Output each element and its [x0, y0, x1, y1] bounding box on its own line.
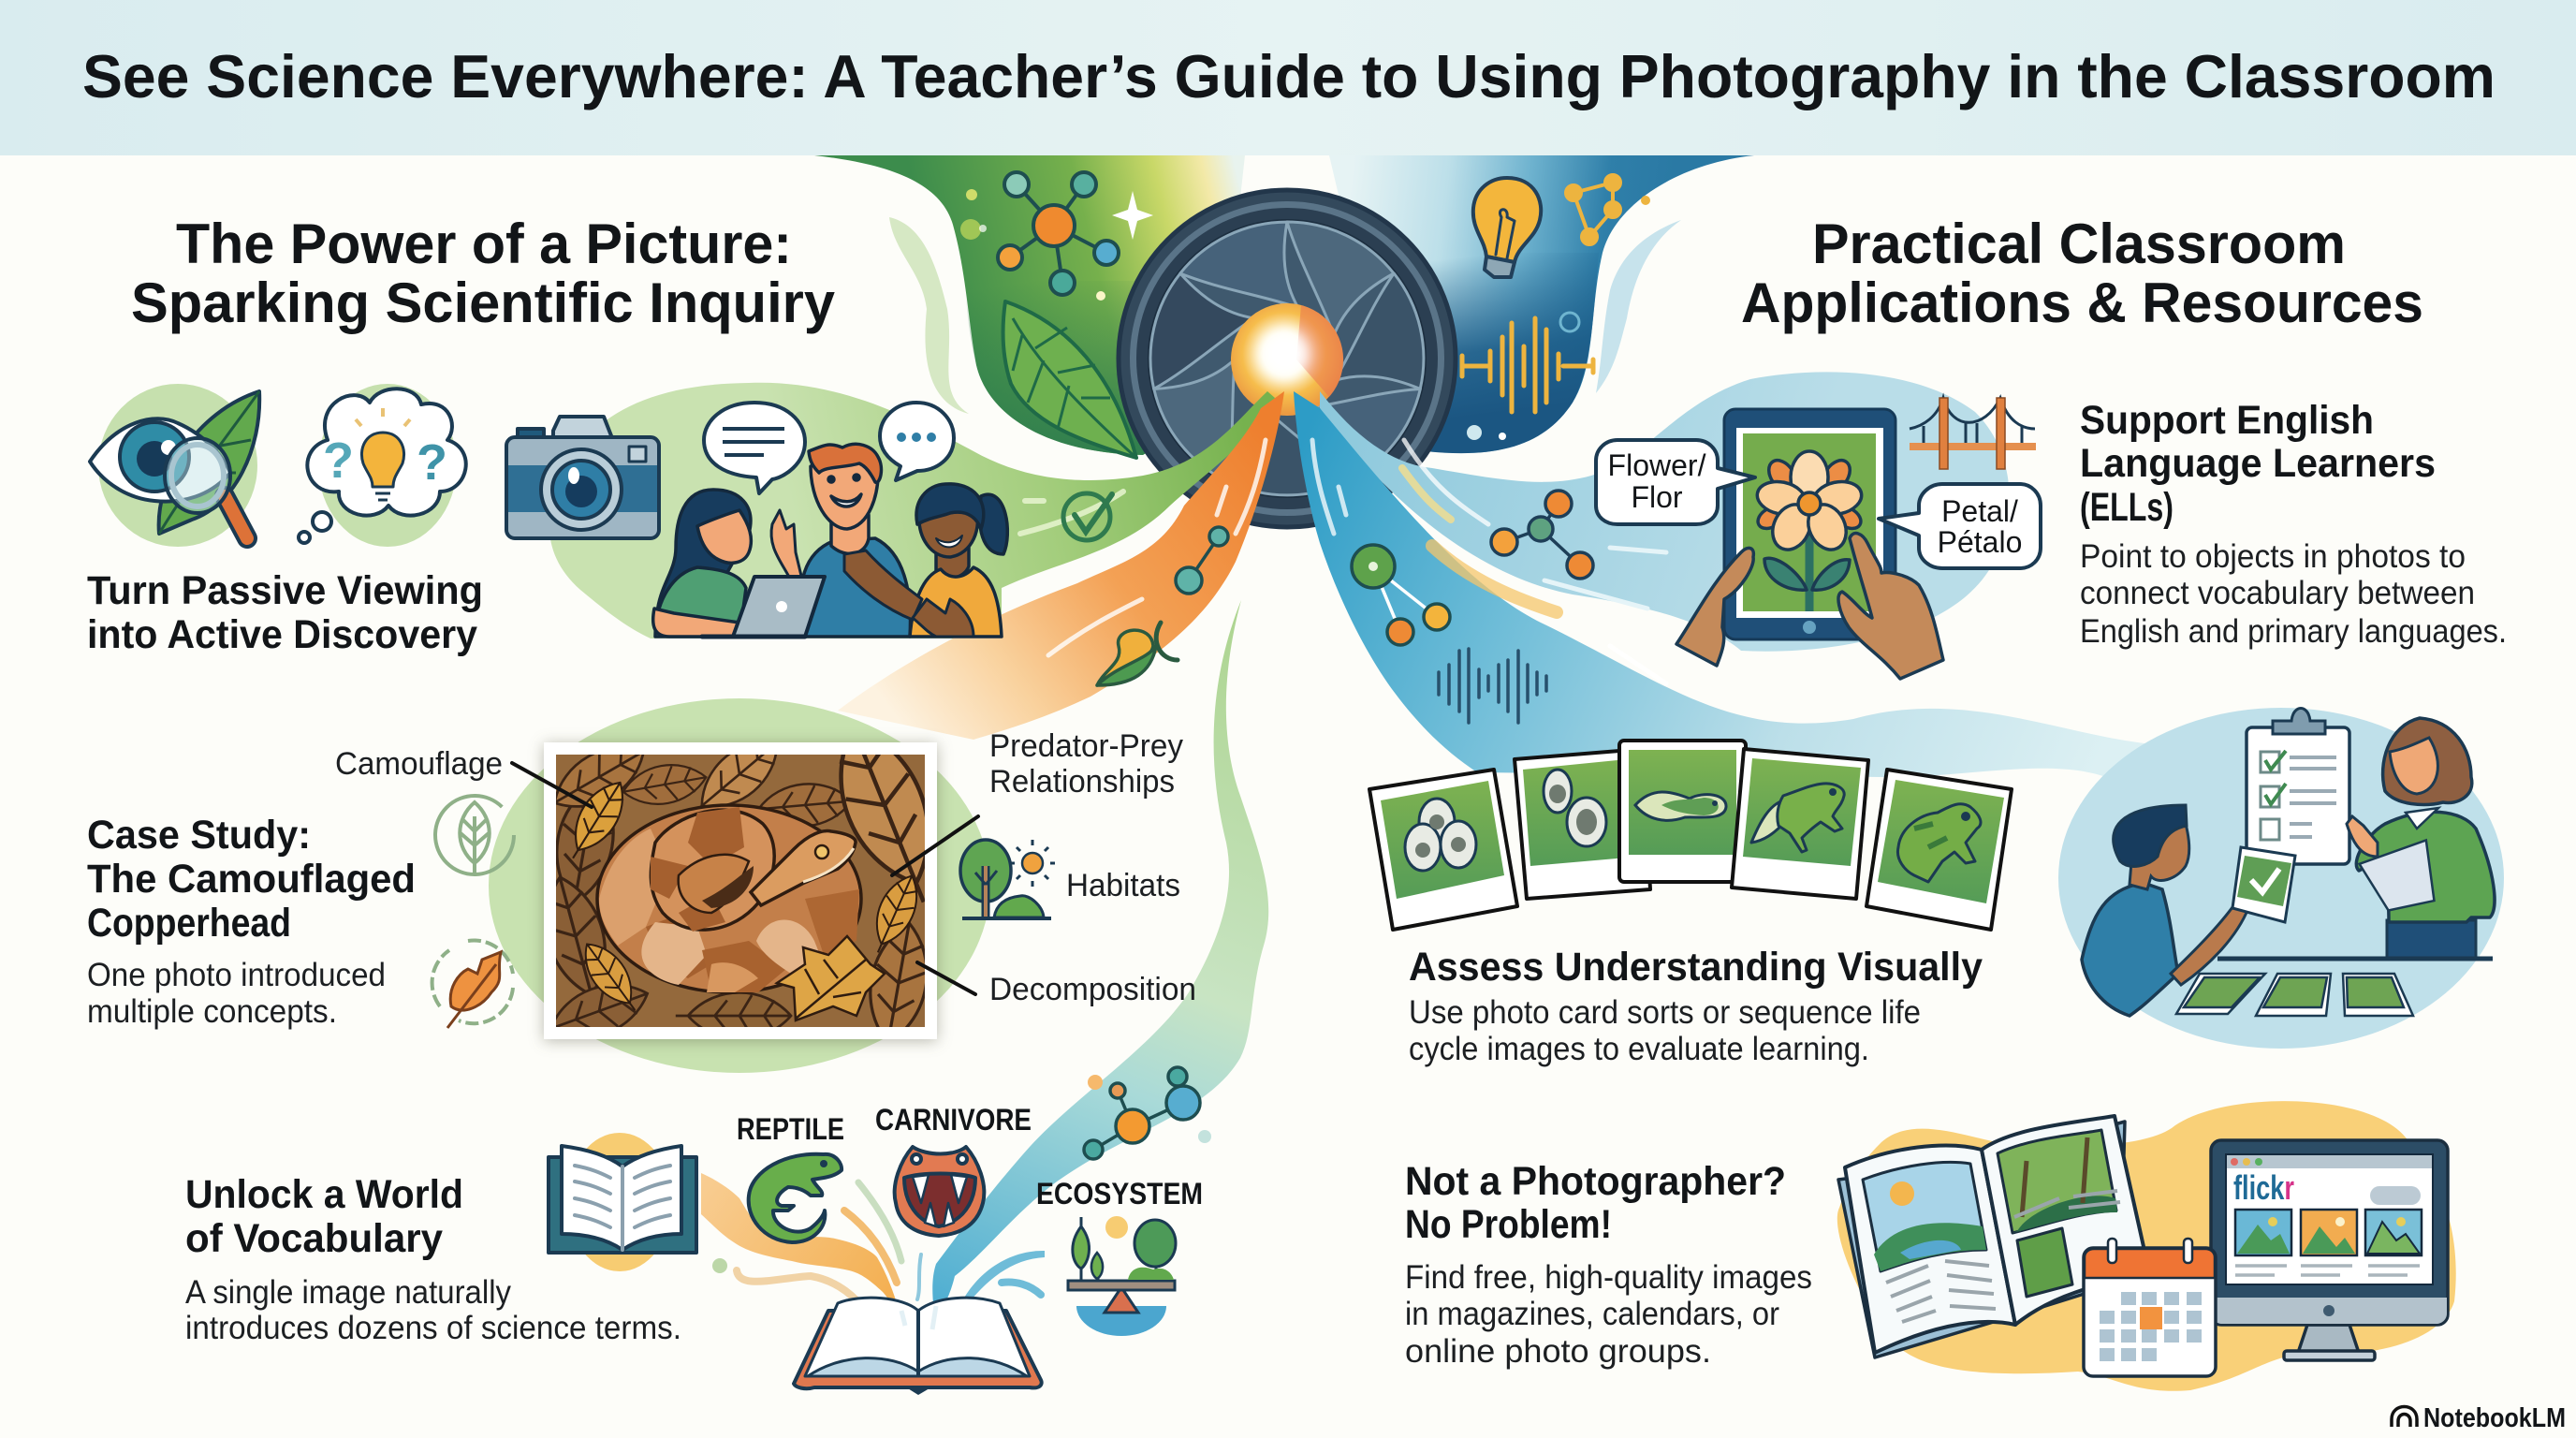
icon: tree and sun habitat [960, 840, 1055, 918]
aperture blades [1130, 190, 1460, 528]
left heading: The Power of a Picture: [176, 213, 792, 275]
text: turn passive viewing: into Active Discovery [87, 612, 477, 657]
leaf litter [556, 755, 925, 1027]
green circle behind photo [489, 698, 990, 1073]
icon: sparkle [1112, 191, 1153, 240]
right heading [1741, 213, 2423, 334]
icon: camera [506, 417, 659, 538]
callout: flower: Flower/ [1608, 448, 1706, 482]
text: unlock vocabulary: Unlock a World [185, 1172, 463, 1217]
icon: lizard [749, 1154, 842, 1242]
callout: petal: Pétalo [1938, 525, 2022, 559]
text: turn passive viewing: Turn Passive Viewing [87, 568, 483, 613]
icon: thought cloud with bulb: ? [323, 433, 354, 489]
callout: flower [1596, 440, 1755, 524]
callout: flower: Flor [1631, 480, 1683, 514]
labels: photo callouts [335, 728, 1196, 1007]
icon: open book with yellow circle [549, 1133, 696, 1271]
icon: light bulb [1473, 178, 1541, 277]
left heading [131, 213, 836, 334]
monitor [2211, 1140, 2448, 1360]
card 2: eggs hatching [1515, 749, 1650, 899]
card 1: eggs [1369, 770, 1517, 930]
text: support ELLs: connect vocabulary between [2080, 575, 2475, 611]
label: reptile: REPTILE [737, 1112, 844, 1146]
text: not a photographer: online photo groups. [1405, 1333, 1711, 1370]
icon: large leaf [1003, 301, 1136, 458]
labels: photo callouts: Habitats [1066, 868, 1180, 903]
tablet device [1724, 409, 1895, 639]
text: support ELLs: Point to objects in photos to [2080, 538, 2466, 575]
photo cards: frog life cycle [1369, 741, 2012, 930]
icon: molecule green [998, 172, 1119, 295]
label: carnivore: CARNIVORE [875, 1103, 1032, 1137]
student [2082, 805, 2248, 1016]
check card [2232, 847, 2295, 922]
text: case study [87, 813, 416, 1030]
blue circle [2058, 708, 2504, 1049]
card 3: tadpole [1619, 741, 1746, 882]
text: not a photographer: in magazines, calendars, or [1405, 1296, 1779, 1332]
icon: leaf in circle [435, 796, 514, 874]
text: assess understanding: Use photo card sorts or sequence life [1409, 994, 1921, 1031]
text: assess understanding: cycle images to evaluate learning. [1409, 1031, 1869, 1067]
right student [844, 484, 1007, 637]
callout: petal [1879, 484, 2041, 568]
stream: green to discovery [549, 383, 1275, 638]
orange ribbon [701, 1173, 1045, 1323]
speech bubble left [704, 403, 805, 493]
icon: thought cloud with bulb [299, 384, 466, 547]
callout: petal: Petal/ [1941, 494, 2018, 528]
icon: molecule near tablet [1491, 491, 1593, 579]
header band [0, 0, 2576, 155]
assess illustration [2058, 708, 2504, 1049]
icon: thought cloud with bulb: ? [417, 434, 447, 491]
text: assess understanding [1409, 945, 1983, 1067]
icon: constellation [1566, 175, 1620, 244]
labels: photo callouts: Decomposition [989, 972, 1196, 1007]
text: support ELLs: Support English [2080, 398, 2374, 443]
text: support ELLs [2080, 398, 2507, 650]
icon: orange stream molecule [1176, 527, 1228, 594]
hands [1676, 548, 1753, 666]
left student [653, 490, 751, 637]
centre student [771, 444, 911, 637]
text: case study: Case Study: [87, 813, 311, 858]
teacher [2347, 718, 2495, 959]
icon: eye with magnifier and leaf [90, 384, 259, 547]
label: ecosystem: ECOSYSTEM [1036, 1177, 1203, 1211]
labels: photo callouts: Camouflage [335, 746, 503, 782]
blue wave behind lens [1329, 155, 1754, 453]
camera aperture lens [1119, 190, 1460, 528]
flower [1754, 451, 1865, 611]
text: support ELLs: Language Learners [2080, 441, 2436, 486]
stream: orange to case study [838, 391, 1284, 740]
icon: decomposing leaf [432, 940, 513, 1028]
text: assess understanding: Assess Understanding Visually [1409, 945, 1983, 990]
snake coils [597, 805, 861, 992]
text: case study: multiple concepts. [87, 993, 337, 1030]
table line [2217, 957, 2493, 961]
text: unlock vocabulary: of Vocabulary [185, 1216, 443, 1261]
icon: molecule over ribbon [1084, 1067, 1200, 1159]
card 5: adult frog [1866, 770, 2012, 930]
icon: check mark circle [1063, 493, 1112, 540]
calendar [2084, 1239, 2216, 1376]
text: turn passive viewing [87, 568, 483, 657]
labels: photo callouts: Relationships [989, 764, 1175, 800]
green wave behind lens [814, 155, 1245, 458]
icon: open jaws [895, 1147, 984, 1236]
icon: ecosystem balance [1068, 1216, 1176, 1336]
icon: sound wave dark [1439, 649, 1546, 723]
resources illustration [1837, 1101, 2456, 1391]
icon: sound wave gold [1462, 318, 1593, 412]
text: support ELLs: (ELLs) [2080, 485, 2174, 530]
text: unlock vocabulary [185, 1172, 681, 1346]
stream highlights [1020, 440, 1666, 683]
stream: blue to cards [1294, 391, 2153, 782]
photo: camouflaged copperhead [535, 736, 945, 1049]
laptop [702, 577, 825, 637]
foreground gold leaves [558, 773, 928, 1020]
icon: seedling shape [1097, 623, 1178, 685]
clipboard [2247, 708, 2349, 864]
text: case study: Copperhead [87, 901, 291, 946]
labels: photo callouts: Predator-Prey [989, 728, 1183, 764]
text: not a photographer: Find free, high-quality images [1405, 1259, 1812, 1296]
icon: blue stream molecule chain [1352, 545, 1450, 645]
speech bubble right [880, 403, 954, 480]
right heading: Practical Classroom [1812, 213, 2346, 275]
text: not a photographer [1405, 1159, 1812, 1370]
title: See Science Everywhere: A Teacher’s Guide to Using Photography in the Classroom [82, 42, 2496, 110]
text: unlock vocabulary: introduces dozens of science terms. [185, 1310, 681, 1346]
text: not a photographer: No Problem! [1405, 1202, 1612, 1247]
text: support ELLs: English and primary languages. [2080, 613, 2507, 650]
yellow blob [1837, 1101, 2456, 1391]
left heading: Sparking Scientific Inquiry [131, 271, 836, 334]
text: not a photographer: Not a Photographer? [1405, 1159, 1786, 1204]
small photo cards [2176, 974, 2413, 1016]
text: case study: The Camouflaged [87, 857, 416, 902]
people: students with laptop [653, 444, 1007, 637]
right heading: Applications & Resources [1741, 271, 2423, 334]
flickr logo text: flickr [2233, 1168, 2294, 1207]
lens light glow [1231, 303, 1343, 416]
tablet with flower [1596, 398, 2041, 679]
icon: bridge [1910, 398, 2036, 469]
stream: green ribbon into book [932, 600, 1268, 1325]
text: unlock vocabulary: A single image naturally [185, 1274, 511, 1311]
stream: light blue to tablet [1320, 372, 2009, 652]
icon: open book with streams [794, 1298, 1042, 1395]
text: case study: One photo introduced [87, 957, 386, 993]
magazine [1838, 1116, 2150, 1357]
card 4: froglet [1732, 749, 1868, 899]
